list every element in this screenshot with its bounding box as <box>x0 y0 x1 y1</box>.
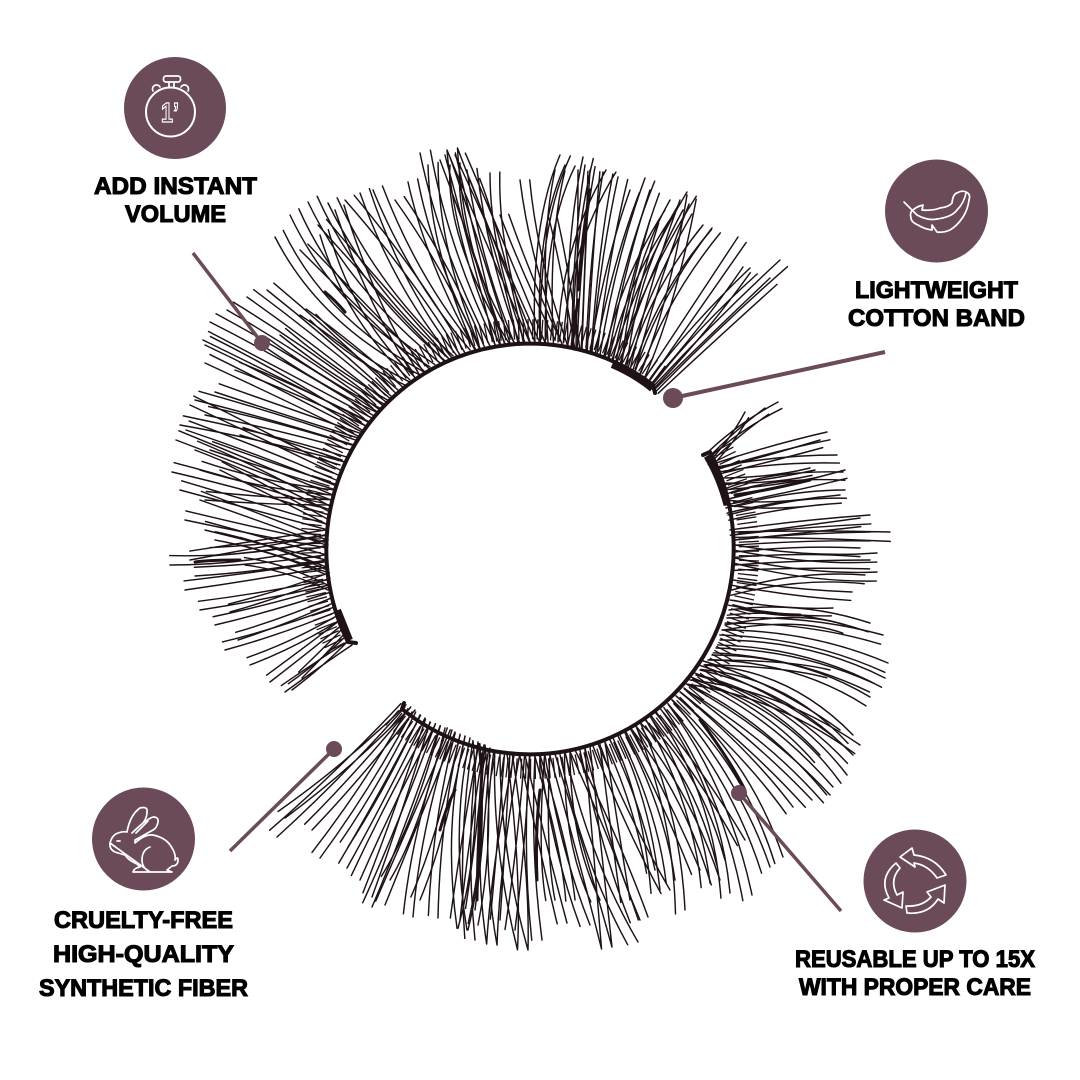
icon: stopwatch: 1’ <box>161 97 179 128</box>
callout: reusable <box>731 785 1035 1001</box>
icon: stopwatch <box>124 57 226 159</box>
label: lightweight cotton band: LIGHTWEIGHT <box>855 277 1018 304</box>
label: add instant volume: VOLUME <box>125 201 226 228</box>
callout: add instant volume <box>94 57 270 351</box>
label: cruelty-free high-quality synthetic fiber: SYNTHETIC FIBER <box>39 975 248 1002</box>
icon: recycle arrows <box>864 830 966 932</box>
label: lightweight cotton band: COTTON BAND <box>848 305 1025 332</box>
label: add instant volume: ADD INSTANT <box>94 173 257 200</box>
leader line: instant volume <box>193 253 270 351</box>
label: add instant volume <box>94 173 257 228</box>
leader line: cruelty-free <box>230 741 342 851</box>
eyelash strip illustration <box>160 141 900 959</box>
callout: lightweight cotton band <box>663 160 1025 408</box>
icon: feather <box>885 160 988 262</box>
label: cruelty-free high-quality synthetic fiber <box>39 907 248 1002</box>
icon: rabbit <box>92 788 195 890</box>
label: cruelty-free high-quality synthetic fiber: CRUELTY-FREE <box>54 907 233 934</box>
leader line: cotton band <box>663 352 885 408</box>
label: lightweight cotton band <box>848 277 1025 332</box>
leader line: reusable <box>731 785 841 911</box>
label: reusable up to 15x <box>795 946 1035 1001</box>
label: reusable up to 15x: WITH PROPER CARE <box>799 974 1031 1001</box>
callout: cruelty-free fiber <box>39 741 342 1002</box>
label: cruelty-free high-quality synthetic fiber: HIGH-QUALITY <box>53 941 234 968</box>
label: reusable up to 15x: REUSABLE UP TO 15X <box>795 946 1035 973</box>
